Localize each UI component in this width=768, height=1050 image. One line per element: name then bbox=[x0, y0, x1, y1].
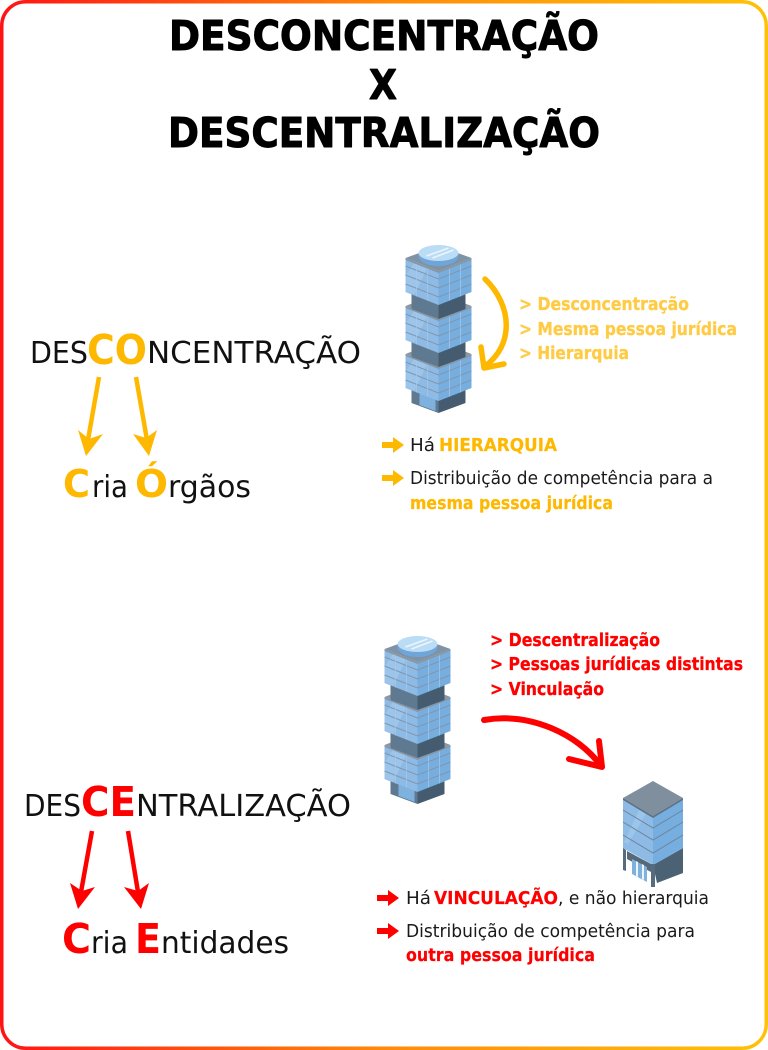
bullet: mesma pessoa jurídica: Distribuição de competência para a bbox=[410, 468, 713, 489]
arrow: curved red bbox=[484, 718, 602, 767]
title bbox=[168, 11, 600, 157]
list: desconcentração: > Mesma pessoa jurídica bbox=[519, 319, 737, 340]
text: Cria Entidades: E bbox=[135, 915, 161, 963]
bullet: Há hierarquia bbox=[382, 435, 557, 456]
arrow: curved yellow bbox=[481, 279, 506, 368]
bullet: mesma pessoa jurídica bbox=[382, 468, 713, 514]
bullet: Há hierarquia: HIERARQUIA bbox=[439, 435, 557, 456]
bullet: outra pessoa jurídica: Distribuição de competência para bbox=[406, 921, 695, 942]
heading: desconcentração word: NCENTRAÇÃO bbox=[147, 335, 361, 371]
text: Cria Entidades bbox=[62, 915, 289, 963]
bullet: outra pessoa jurídica bbox=[377, 921, 695, 966]
heading: descentralização word: CE bbox=[81, 778, 136, 826]
list: desconcentração: > Desconcentração bbox=[519, 294, 689, 315]
heading: desconcentração word bbox=[30, 326, 361, 374]
bullet: mesma pessoa jurídica: mesma pessoa jurídica bbox=[410, 493, 613, 514]
text: Cria Entidades: ria bbox=[91, 926, 128, 961]
bullet: Há vinculação: Há bbox=[406, 888, 431, 909]
heading: desconcentração word: CO bbox=[87, 326, 147, 374]
text: Cria Órgãos: C bbox=[63, 462, 90, 506]
list: descentralização: > Vinculação bbox=[490, 679, 604, 700]
list: descentralização: > Descentralização bbox=[490, 630, 660, 651]
bullet: Há vinculação bbox=[377, 886, 709, 909]
heading: descentralização word: NTRALIZAÇÃO bbox=[136, 788, 351, 824]
bullet: Há vinculação: VINCULAÇÃO bbox=[434, 886, 558, 909]
bullet: Há vinculação: , e não hierarquia bbox=[558, 888, 709, 909]
arrows: CO to Cria Órgãos bbox=[78, 377, 157, 456]
title: DESCONCENTRAÇÃO bbox=[169, 11, 599, 60]
text: Cria Entidades: ntidades bbox=[161, 926, 289, 961]
text: Cria Órgãos: ria bbox=[92, 470, 128, 505]
heading: descentralização word bbox=[24, 778, 351, 826]
icon: tower, descentralização bbox=[384, 636, 450, 804]
text: Cria Órgãos bbox=[63, 462, 251, 506]
title: X bbox=[369, 61, 397, 109]
bullet: outra pessoa jurídica: outra pessoa jurídica bbox=[406, 945, 595, 966]
text: Cria Órgãos: rgãos bbox=[168, 470, 251, 505]
icon: tower, desconcentração bbox=[406, 245, 472, 413]
text: Cria Órgãos: Ó bbox=[135, 462, 168, 506]
arrows: CE to Cria Entidades bbox=[70, 831, 149, 909]
list: desconcentração: > Hierarquia bbox=[519, 343, 629, 364]
list: desconcentração bbox=[519, 294, 737, 364]
heading: descentralização word: DES bbox=[24, 789, 81, 824]
list: descentralização bbox=[490, 630, 743, 700]
title: DESCENTRALIZAÇÃO bbox=[168, 108, 600, 157]
heading: desconcentração word: DES bbox=[30, 336, 88, 371]
text: Cria Entidades: C bbox=[62, 915, 91, 963]
icon: small building bbox=[623, 781, 683, 887]
bullet: Há hierarquia: Há bbox=[410, 435, 435, 456]
